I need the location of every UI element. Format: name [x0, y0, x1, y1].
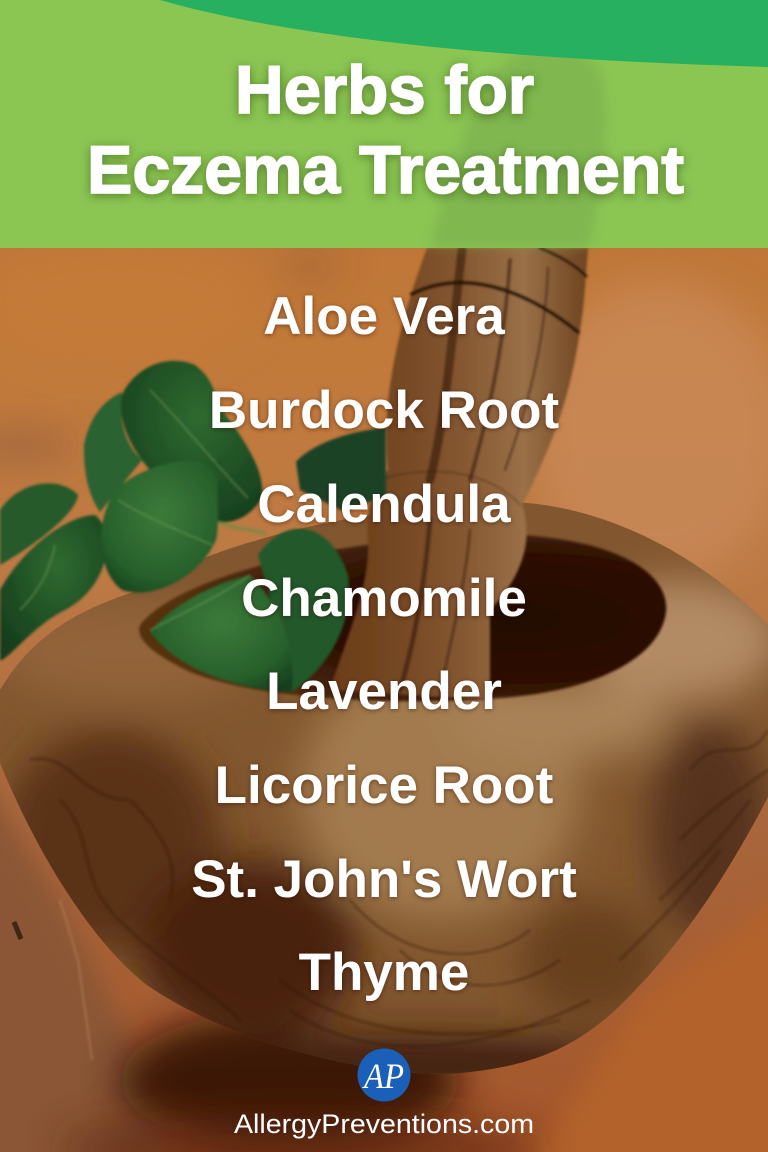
background: soft colour areas on table [0, 240, 768, 580]
leaf: in bowl right [258, 529, 349, 692]
website url: AllergyPreventions.com [234, 1109, 534, 1139]
leaf: upper tall [120, 361, 262, 522]
herb list: Lavender [266, 662, 502, 721]
heading: Eczema Treatment [87, 132, 684, 208]
heading [87, 52, 684, 208]
pestle [330, 248, 588, 700]
banner: dark green corner swoosh [160, 0, 768, 67]
mortar: inner cavity [139, 535, 666, 701]
herb list: Calendula [257, 475, 511, 534]
leaf: veins and stem [20, 390, 266, 630]
herb list: Chamomile [241, 569, 527, 628]
mortar: grain lines [30, 730, 768, 1046]
leaf: far left [0, 483, 78, 565]
photo background: mortar, pestle and basil on wooden table [0, 248, 768, 1152]
banner: light green band [0, 0, 768, 248]
herb list: Burdock Root [209, 381, 559, 440]
herb list: Aloe Vera [263, 287, 505, 346]
leaf: centre front [101, 460, 222, 593]
pestle: grooves and grain [385, 248, 586, 695]
leaf: stem side [84, 392, 142, 512]
basil leaves [0, 361, 386, 692]
herb list: Licorice Root [215, 756, 553, 815]
leaf: left big [0, 515, 107, 660]
herb list: Thyme [299, 943, 469, 1002]
logo: AP circle [358, 1048, 410, 1102]
title banner [0, 0, 768, 248]
herb list [191, 287, 577, 1002]
mortar: tonal areas [0, 580, 768, 1095]
leaf: back right [296, 428, 386, 512]
heading: Herbs for [235, 52, 534, 128]
banner: ghost pestle showing through [430, 46, 606, 248]
mortar body [0, 490, 768, 1095]
herb list: St. John's Wort [191, 850, 577, 909]
background: table planks in foreground [0, 760, 768, 1152]
logo: AP circle: AP [362, 1056, 404, 1096]
leaf: in bowl left [150, 575, 293, 692]
